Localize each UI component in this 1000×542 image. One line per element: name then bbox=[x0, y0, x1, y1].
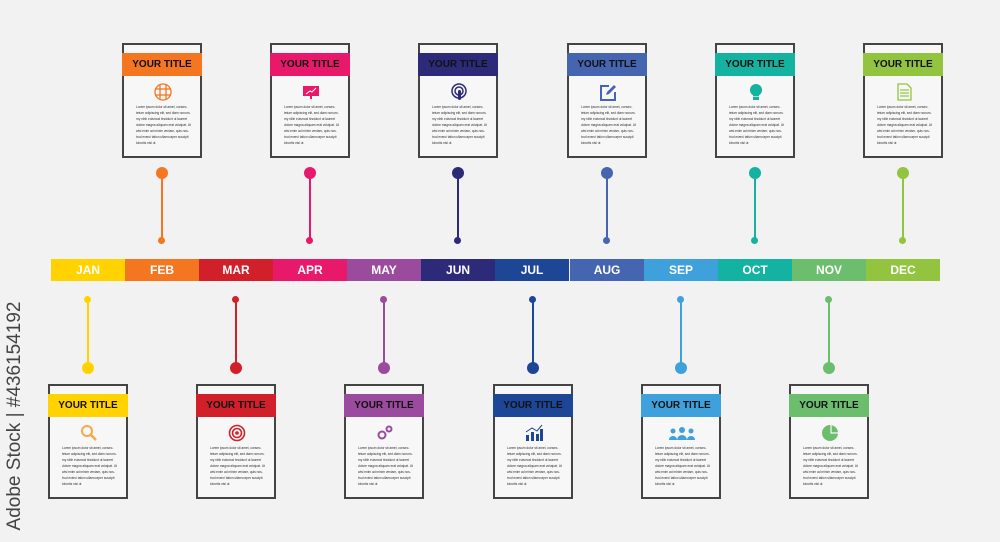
card: JAN: YOUR TITLE bbox=[58, 400, 118, 411]
timeline bar: SEP bbox=[669, 263, 693, 277]
icon: target bbox=[228, 424, 246, 442]
card: DEC: trud exerci tation ullamcorper suscipit bbox=[877, 135, 929, 139]
card: FEB: wisi enim ad minim veniam, quis nos- bbox=[136, 129, 189, 133]
card: APR: dolore magna aliquam erat volutpat. Ut bbox=[284, 123, 339, 127]
icon: edit bbox=[600, 85, 616, 101]
card: JAN: wisi enim ad minim veniam, quis nos- bbox=[62, 470, 115, 474]
card: OCT: YOUR TITLE bbox=[725, 59, 785, 70]
card: MAR: lobortis nisl ut bbox=[210, 482, 229, 486]
card: JUL bbox=[493, 384, 573, 499]
card: DEC: lobortis nisl ut bbox=[877, 141, 896, 145]
timeline bar: MAR bbox=[222, 263, 250, 277]
card: OCT: my nibh euismod tincidunt ut laoreet bbox=[729, 117, 780, 121]
icon: search bbox=[81, 425, 97, 441]
card: NOV: my nibh euismod tincidunt ut laoreet bbox=[803, 458, 854, 462]
timeline bar: OCT bbox=[742, 263, 768, 277]
timeline bar: JUN bbox=[446, 263, 470, 277]
card: AUG bbox=[567, 43, 647, 158]
card: SEP: dolore magna aliquam erat volutpat. Ut bbox=[655, 464, 710, 468]
card: OCT: Lorem ipsum dolor sit amet, consec- bbox=[729, 105, 780, 109]
card: JUN: my nibh euismod tincidunt ut laoreet bbox=[432, 117, 483, 121]
card: JAN: dolore magna aliquam erat volutpat. Ut bbox=[62, 464, 117, 468]
card: MAR: dolore magna aliquam erat volutpat. Ut bbox=[210, 464, 265, 468]
card: SEP: trud exerci tation ullamcorper suscipit bbox=[655, 476, 707, 480]
card: APR: my nibh euismod tincidunt ut laoreet bbox=[284, 117, 335, 121]
card: SEP: YOUR TITLE bbox=[651, 400, 711, 411]
card: MAY: my nibh euismod tincidunt ut laoreet bbox=[358, 458, 409, 462]
card: MAR: wisi enim ad minim veniam, quis nos- bbox=[210, 470, 263, 474]
card: JUN: dolore magna aliquam erat volutpat. Ut bbox=[432, 123, 487, 127]
card: OCT bbox=[715, 43, 795, 158]
card: JAN: Lorem ipsum dolor sit amet, consec- bbox=[62, 446, 113, 450]
card: FEB: tetuer adipiscing elit, sed diam nonum- bbox=[136, 111, 190, 115]
card: NOV: trud exerci tation ullamcorper suscipit bbox=[803, 476, 855, 480]
card: JAN bbox=[48, 384, 128, 499]
card: JUL: YOUR TITLE bbox=[503, 400, 563, 411]
card: MAY: trud exerci tation ullamcorper suscipit bbox=[358, 476, 410, 480]
card: MAY: tetuer adipiscing elit, sed diam nonum- bbox=[358, 452, 412, 456]
card: SEP: Lorem ipsum dolor sit amet, consec- bbox=[655, 446, 706, 450]
card: JUN: Lorem ipsum dolor sit amet, consec- bbox=[432, 105, 483, 109]
icon: gears bbox=[378, 426, 392, 440]
card: JUL: wisi enim ad minim veniam, quis nos- bbox=[507, 470, 560, 474]
card: OCT: tetuer adipiscing elit, sed diam nonum- bbox=[729, 111, 784, 115]
card: DEC: wisi enim ad minim veniam, quis nos- bbox=[877, 129, 930, 133]
card: JUN: trud exerci tation ullamcorper suscipit bbox=[432, 135, 484, 139]
card: FEB: Lorem ipsum dolor sit amet, consec- bbox=[136, 105, 187, 109]
card: JAN: trud exerci tation ullamcorper suscipit bbox=[62, 476, 114, 480]
card: JUL: dolore magna aliquam erat volutpat. Ut bbox=[507, 464, 562, 468]
card: FEB bbox=[122, 43, 202, 158]
card: AUG: tetuer adipiscing elit, sed diam nonum- bbox=[581, 111, 636, 115]
card: MAR: my nibh euismod tincidunt ut laoreet bbox=[210, 458, 261, 462]
card: JUL: trud exerci tation ullamcorper suscipit bbox=[507, 476, 559, 480]
card: DEC: Lorem ipsum dolor sit amet, consec- bbox=[877, 105, 928, 109]
card: DEC: tetuer adipiscing elit, sed diam nonum- bbox=[877, 111, 932, 115]
icon: touch bbox=[451, 83, 467, 100]
card: JUN: tetuer adipiscing elit, sed diam nonum- bbox=[432, 111, 486, 115]
card: NOV: YOUR TITLE bbox=[799, 400, 859, 411]
card: NOV: lobortis nisl ut bbox=[803, 482, 822, 486]
card: JUN: YOUR TITLE bbox=[428, 59, 488, 70]
timeline bar: APR bbox=[297, 263, 323, 277]
card: NOV: dolore magna aliquam erat volutpat. Ut bbox=[803, 464, 858, 468]
card: MAR: YOUR TITLE bbox=[206, 400, 266, 411]
card: SEP: tetuer adipiscing elit, sed diam nonum- bbox=[655, 452, 710, 456]
card: MAY: dolore magna aliquam erat volutpat. Ut bbox=[358, 464, 413, 468]
card: APR: YOUR TITLE bbox=[280, 59, 340, 70]
icon: globe bbox=[154, 83, 172, 101]
timeline bar: JAN bbox=[76, 263, 100, 277]
card: NOV: Lorem ipsum dolor sit amet, consec- bbox=[803, 446, 854, 450]
card: JAN: lobortis nisl ut bbox=[62, 482, 81, 486]
card: MAY: YOUR TITLE bbox=[354, 400, 414, 411]
timeline bar: AUG bbox=[594, 263, 620, 277]
card: MAR: trud exerci tation ullamcorper suscipit bbox=[210, 476, 262, 480]
icon: bulb bbox=[750, 84, 762, 100]
icon: document bbox=[897, 83, 912, 101]
card: NOV: wisi enim ad minim veniam, quis nos- bbox=[803, 470, 856, 474]
card: JAN: my nibh euismod tincidunt ut laoreet bbox=[62, 458, 113, 462]
card: AUG: lobortis nisl ut bbox=[581, 141, 600, 145]
card: SEP: my nibh euismod tincidunt ut laoreet bbox=[655, 458, 706, 462]
card: SEP: wisi enim ad minim veniam, quis nos- bbox=[655, 470, 708, 474]
card: OCT: trud exerci tation ullamcorper suscipit bbox=[729, 135, 781, 139]
card: APR: Lorem ipsum dolor sit amet, consec- bbox=[284, 105, 335, 109]
icon: presentation bbox=[303, 86, 319, 99]
card: MAY bbox=[344, 384, 424, 499]
card: JAN: tetuer adipiscing elit, sed diam nonum- bbox=[62, 452, 116, 456]
card: NOV bbox=[789, 384, 869, 499]
card: MAY: wisi enim ad minim veniam, quis nos- bbox=[358, 470, 411, 474]
card: FEB: my nibh euismod tincidunt ut laoreet bbox=[136, 117, 187, 121]
card: AUG: wisi enim ad minim veniam, quis nos- bbox=[581, 129, 634, 133]
card: JUN: wisi enim ad minim veniam, quis nos- bbox=[432, 129, 485, 133]
card: DEC bbox=[863, 43, 943, 158]
card: APR: wisi enim ad minim veniam, quis nos- bbox=[284, 129, 337, 133]
card: DEC: my nibh euismod tincidunt ut laoreet bbox=[877, 117, 928, 121]
card: APR: trud exerci tation ullamcorper suscipit bbox=[284, 135, 336, 139]
icon: pie bbox=[822, 425, 838, 441]
card: AUG: YOUR TITLE bbox=[577, 59, 637, 70]
timeline bar: FEB bbox=[150, 263, 174, 277]
card: SEP bbox=[641, 384, 721, 499]
card: FEB: lobortis nisl ut bbox=[136, 141, 155, 145]
timeline bar: NOV bbox=[816, 263, 842, 277]
card: MAR: tetuer adipiscing elit, sed diam nonum- bbox=[210, 452, 264, 456]
card: JUL: my nibh euismod tincidunt ut laoreet bbox=[507, 458, 558, 462]
card: JUN bbox=[418, 43, 498, 158]
card: APR: tetuer adipiscing elit, sed diam nonum- bbox=[284, 111, 338, 115]
card: OCT: dolore magna aliquam erat volutpat. Ut bbox=[729, 123, 784, 127]
card: JUL: tetuer adipiscing elit, sed diam nonum- bbox=[507, 452, 562, 456]
card: APR: lobortis nisl ut bbox=[284, 141, 303, 145]
card: APR bbox=[270, 43, 350, 158]
card: AUG: Lorem ipsum dolor sit amet, consec- bbox=[581, 105, 632, 109]
card: DEC: dolore magna aliquam erat volutpat. Ut bbox=[877, 123, 932, 127]
timeline bar: MAY bbox=[371, 263, 397, 277]
card: MAR bbox=[196, 384, 276, 499]
card: JUL: Lorem ipsum dolor sit amet, consec- bbox=[507, 446, 558, 450]
card: OCT: wisi enim ad minim veniam, quis nos- bbox=[729, 129, 782, 133]
icon: team bbox=[669, 427, 695, 440]
card: FEB: dolore magna aliquam erat volutpat. Ut bbox=[136, 123, 191, 127]
card: MAR: Lorem ipsum dolor sit amet, consec- bbox=[210, 446, 261, 450]
card: OCT: lobortis nisl ut bbox=[729, 141, 748, 145]
card: AUG: dolore magna aliquam erat volutpat. Ut bbox=[581, 123, 636, 127]
card: AUG: my nibh euismod tincidunt ut laoreet bbox=[581, 117, 632, 121]
card: FEB: trud exerci tation ullamcorper suscipit bbox=[136, 135, 188, 139]
card: SEP: lobortis nisl ut bbox=[655, 482, 674, 486]
card: NOV: tetuer adipiscing elit, sed diam nonum- bbox=[803, 452, 858, 456]
card: AUG: trud exerci tation ullamcorper suscipit bbox=[581, 135, 633, 139]
card: JUN: lobortis nisl ut bbox=[432, 141, 451, 145]
card: JUL: lobortis nisl ut bbox=[507, 482, 526, 486]
card: DEC: YOUR TITLE bbox=[873, 59, 933, 70]
watermark side text: Adobe Stock | #436154192 bbox=[4, 302, 25, 530]
card: FEB: YOUR TITLE bbox=[132, 59, 192, 70]
timeline bar: JUL bbox=[521, 263, 543, 277]
timeline bar: DEC bbox=[890, 263, 916, 277]
icon: chart bbox=[526, 424, 543, 441]
card: MAY: lobortis nisl ut bbox=[358, 482, 377, 486]
card: MAY: Lorem ipsum dolor sit amet, consec- bbox=[358, 446, 409, 450]
